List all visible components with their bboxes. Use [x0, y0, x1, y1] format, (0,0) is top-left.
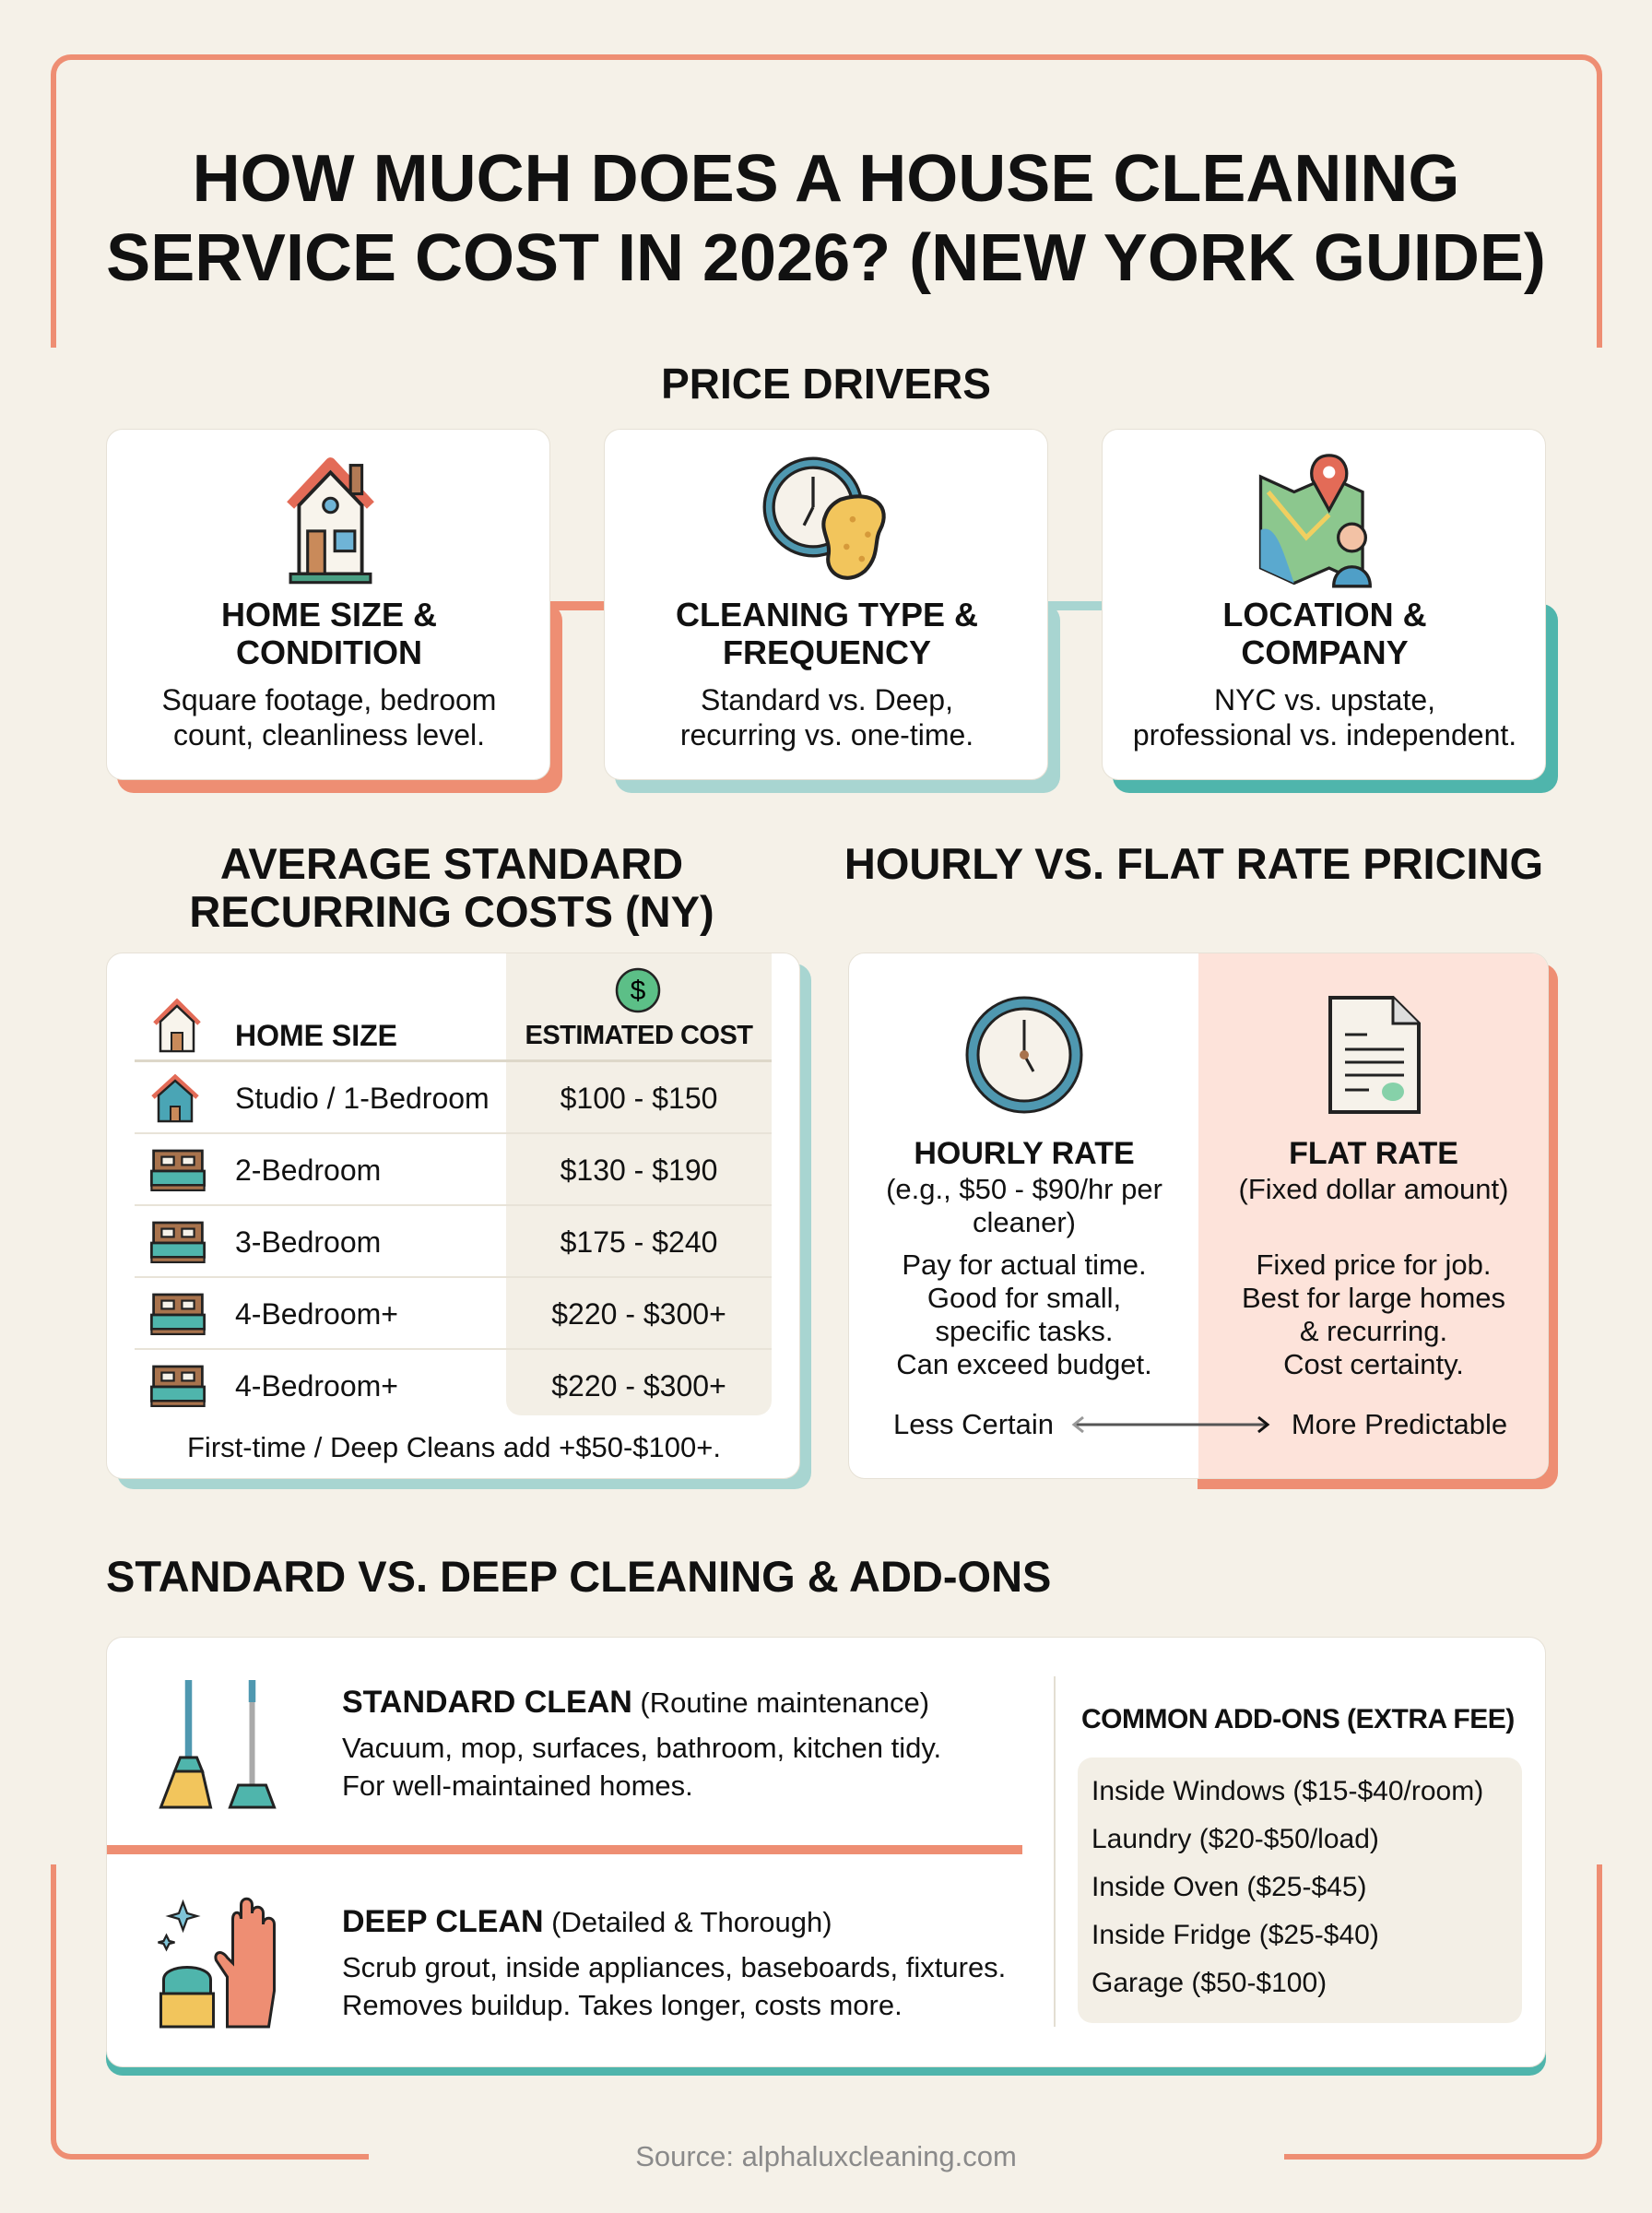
- flat text: [1239, 1136, 1508, 1380]
- text: recurring vs. one-time.: [680, 718, 974, 751]
- table rows: Studio / 1-Bedroom: [235, 1082, 490, 1115]
- arrow scale: Less Certain: [893, 1408, 1054, 1440]
- icon: dollar: [616, 968, 660, 1012]
- heading: average costs: [189, 839, 714, 936]
- heading: FREQUENCY: [723, 633, 931, 671]
- panel: home size: [106, 429, 562, 793]
- arrow scale: More Predictable: [1292, 1408, 1507, 1440]
- hourly text: cleaner) Pay for actual time.: [902, 1206, 1147, 1281]
- table rows: $220 - $300+: [551, 1297, 726, 1331]
- text: [680, 683, 974, 751]
- panel: standard vs deep: [106, 1637, 1546, 2076]
- table header: ESTIMATED COST: [525, 1021, 753, 1050]
- title: [106, 142, 1546, 295]
- add-ons list: Laundry ($20-$50/load): [1092, 1824, 1379, 1854]
- table header: [135, 998, 772, 1062]
- heading: standard vs deep: STANDARD VS. DEEP CLEANING & ADD-ONS: [106, 1552, 1051, 1601]
- heading: [1222, 596, 1427, 671]
- table rows: $175 - $240: [560, 1225, 717, 1259]
- text: count, cleanliness level.: [173, 718, 485, 751]
- heading: [221, 596, 437, 671]
- table rows: $220 - $300+: [551, 1369, 726, 1402]
- icon: map with pin and person: [1259, 454, 1372, 588]
- heading: hourly vs flat: HOURLY VS. FLAT RATE PRICING: [844, 839, 1543, 888]
- standard text: For well-maintained homes.: [342, 1769, 693, 1802]
- text: Standard vs. Deep,: [701, 683, 953, 716]
- icon: document: [1328, 996, 1421, 1114]
- hourly text: Can exceed budget.: [896, 1348, 1152, 1380]
- icon: clock and sponge: [763, 457, 886, 580]
- text: [162, 683, 496, 751]
- heading: HOME SIZE &: [221, 596, 437, 633]
- icon: broom and mop: [159, 1680, 277, 1809]
- table rows: [135, 1073, 772, 1407]
- add-ons heading: COMMON ADD-ONS (EXTRA FEE): [1081, 1704, 1515, 1734]
- add-ons list: [1078, 1757, 1522, 2023]
- heading: CLEANING TYPE &: [676, 596, 978, 633]
- table header: HOME SIZE: [235, 1019, 397, 1052]
- divider: [107, 1845, 1022, 1854]
- text: Square footage, bedroom: [162, 683, 496, 716]
- source: Source: alphaluxcleaning.com: [635, 2140, 1017, 2172]
- frame bottom: [51, 1864, 1602, 2160]
- flat text: Best for large homes: [1242, 1282, 1505, 1314]
- flat text: FLAT RATE: [1289, 1136, 1458, 1171]
- panel: cleaning type: [604, 429, 1060, 793]
- hourly text: Good for small,: [927, 1282, 1121, 1314]
- heading: [676, 596, 978, 671]
- arrow scale: [893, 1408, 1507, 1440]
- hourly text: (e.g., $50 - $90/hr per: [886, 1173, 1162, 1205]
- title: SERVICE COST IN 2026? (NEW YORK GUIDE): [106, 221, 1546, 295]
- frame top: [51, 54, 1602, 348]
- text: NYC vs. upstate,: [1214, 683, 1435, 716]
- hourly text: HOURLY RATE: [914, 1136, 1135, 1171]
- standard text: [342, 1685, 941, 1802]
- icon: brush and glove: [158, 1898, 276, 2029]
- deep text: DEEP CLEAN (Detailed & Thorough) Scrub grout, inside appliances, baseboards, fixtures.: [342, 1904, 1006, 1983]
- add-ons list: Inside Windows ($15-$40/room): [1092, 1776, 1483, 1806]
- connectors: [550, 601, 606, 610]
- panel: cost table: [106, 953, 811, 1489]
- standard text: STANDARD CLEAN (Routine maintenance) Vacuum, mop, surfaces, bathroom, kitchen tidy.: [342, 1685, 941, 1764]
- heading: average costs: RECURRING COSTS (NY): [189, 887, 714, 936]
- heading: average costs: AVERAGE STANDARD: [220, 839, 683, 888]
- heading: LOCATION &: [1222, 596, 1427, 633]
- icon: clock: [966, 996, 1082, 1114]
- table rows: 4-Bedroom+: [235, 1297, 398, 1331]
- panel: hourly vs flat: [848, 953, 1558, 1489]
- icon: house: [287, 457, 374, 585]
- add-ons list: Inside Oven ($25-$45): [1092, 1872, 1367, 1902]
- add-ons list: Garage ($50-$100): [1092, 1968, 1327, 1998]
- add-ons list: Inside Fridge ($25-$40): [1092, 1920, 1379, 1950]
- flat text: & recurring.: [1300, 1315, 1447, 1347]
- table rows: 2-Bedroom: [235, 1154, 381, 1187]
- title: HOW MUCH DOES A HOUSE CLEANING: [193, 142, 1459, 216]
- hourly text: specific tasks.: [936, 1315, 1113, 1347]
- heading: CONDITION: [236, 633, 422, 671]
- panel: location: [1102, 429, 1558, 793]
- hourly text: [886, 1136, 1162, 1380]
- footnote: First-time / Deep Cleans add +$50-$100+.: [187, 1431, 721, 1463]
- table rows: $130 - $190: [560, 1154, 717, 1187]
- deep text: [342, 1904, 1006, 2021]
- flat text: Cost certainty.: [1283, 1348, 1464, 1380]
- table rows: 3-Bedroom: [235, 1225, 381, 1259]
- heading: COMPANY: [1241, 633, 1409, 671]
- flat text: (Fixed dollar amount) Fixed price for job.: [1239, 1173, 1508, 1281]
- table rows: 4-Bedroom+: [235, 1369, 398, 1402]
- deep text: Removes buildup. Takes longer, costs more.: [342, 1989, 903, 2021]
- text: professional vs. independent.: [1133, 718, 1516, 751]
- heading: price drivers: PRICE DRIVERS: [661, 360, 991, 408]
- icon: dollar: $: [631, 976, 646, 1006]
- text: [1133, 683, 1516, 751]
- table rows: $100 - $150: [560, 1082, 717, 1115]
